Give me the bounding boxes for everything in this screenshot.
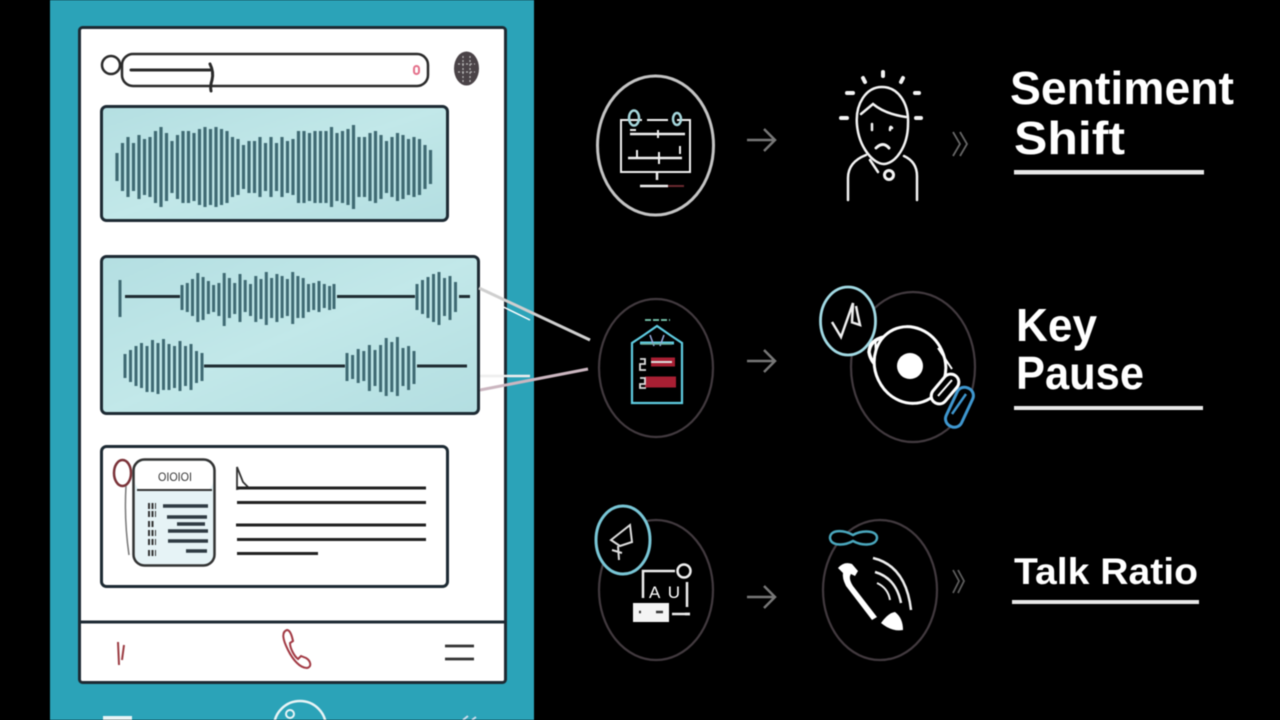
phone screen [80,28,506,682]
arrow 1 [747,129,775,151]
search bar [102,54,428,91]
icon: AU board circle: A U [649,583,680,602]
icon: vinyl record with note [820,287,976,442]
mini report card: OIOIOI [158,470,192,484]
panel: transcript card [102,446,448,586]
title: talk ratio: Talk Ratio [1014,551,1198,592]
icon: phone with signal [823,520,937,660]
title: key pause: Pause [1016,347,1144,399]
icon: pencil mark [237,467,248,489]
mini report card [134,460,214,566]
connector lines [479,288,590,390]
transcript lines [236,488,426,554]
icon: menu [445,646,474,659]
title: key pause: Key [1016,299,1097,351]
title: sentiment shift [1010,62,1234,174]
icon: tally marks [118,642,124,665]
arrow 3 [747,586,775,608]
bottom navigation [80,622,505,668]
panel: waveform top [102,106,448,220]
chevrons 3 [953,570,964,593]
icon: red pin [114,460,131,555]
icon: AU board circle [596,506,713,660]
icon: phone [283,630,310,668]
phone home controls [103,701,476,720]
title: sentiment shift: Shift [1014,112,1125,164]
icon: avatar [454,52,479,86]
title: key pause [1014,299,1203,410]
panel: waveform highlighted [102,256,478,414]
icon: monitor chart circle [598,76,714,215]
panel: phone mockup [50,0,534,720]
icon: clipboard circle [599,299,713,437]
title: sentiment shift: Sentiment [1010,62,1234,114]
icon: worried person [841,72,921,200]
arrow 2 [747,350,775,372]
chevrons 1 [953,132,967,156]
